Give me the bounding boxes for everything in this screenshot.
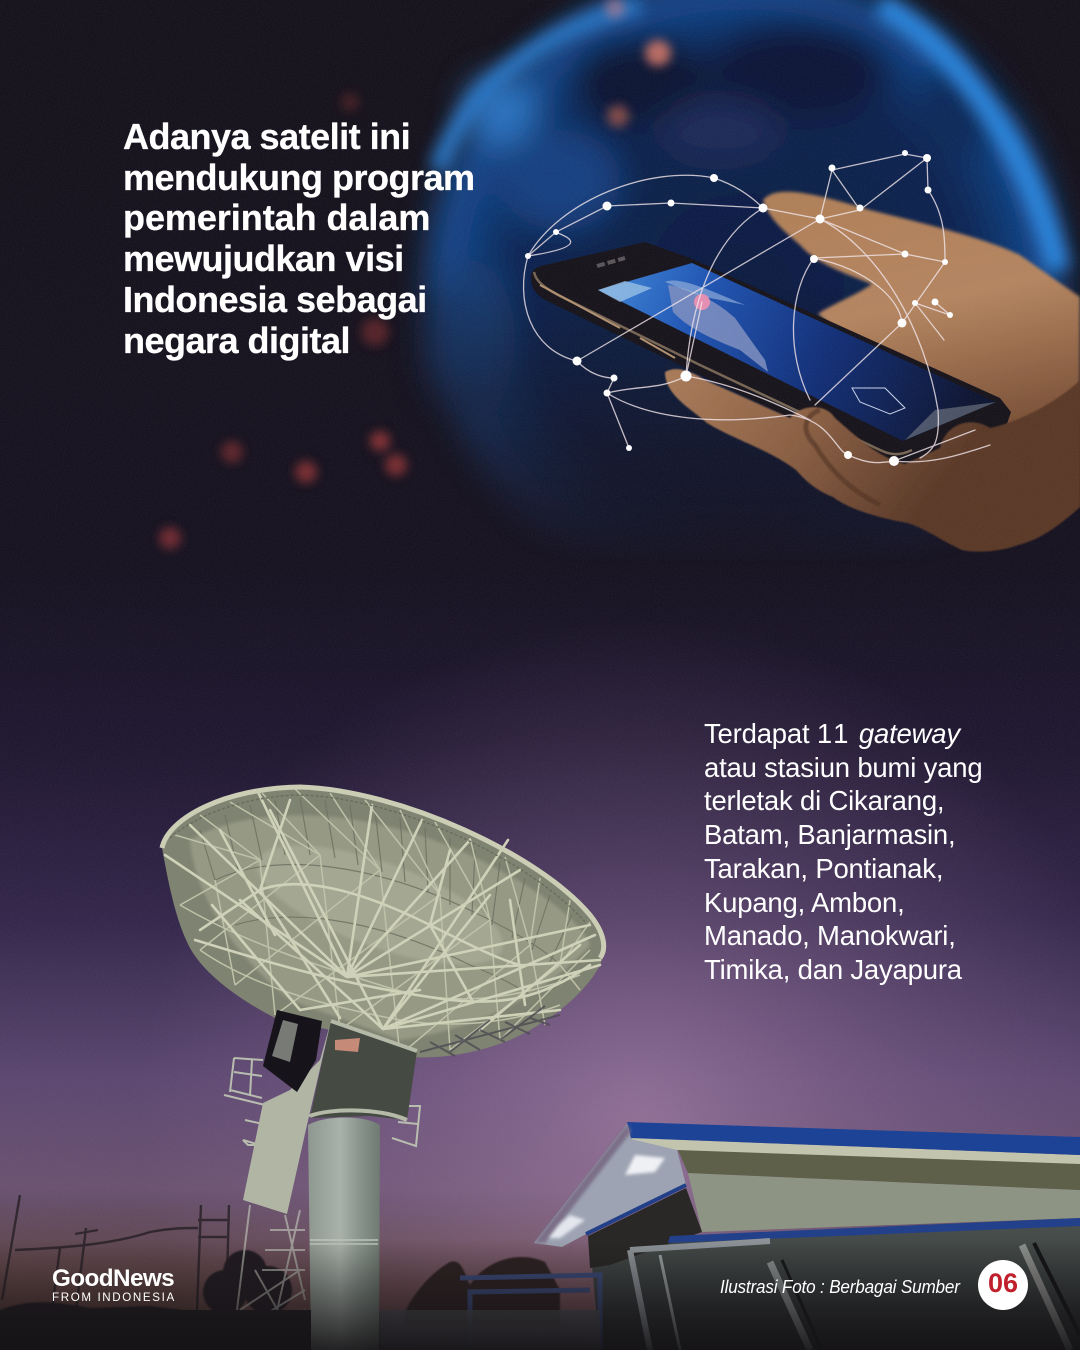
phone metallic edge: [534, 272, 912, 454]
dish thin truss lattice: [175, 789, 590, 1055]
blue roof band: [627, 1122, 1080, 1155]
blue fascia stripe: [668, 1218, 1080, 1243]
heading: mendukung program: [123, 157, 475, 198]
soffit highlights: [534, 1124, 665, 1243]
pedestal column: [308, 1118, 380, 1350]
gateway text block: terletak di Cikarang,: [704, 785, 944, 816]
lower wall: [590, 1222, 1080, 1350]
gate structure: [460, 1275, 600, 1350]
satellite dish antenna: [162, 787, 604, 1350]
roof soffit: [534, 1124, 686, 1247]
tree silhouettes: [0, 1250, 560, 1325]
dark lattice window: [588, 1188, 702, 1268]
gateway text block: Tarakan, Pontianak,: [704, 853, 943, 884]
yoke arm panel: [243, 1021, 331, 1214]
heading: Indonesia sebagai: [123, 279, 427, 320]
dish rim: [162, 787, 604, 958]
feed horn detail: [272, 1020, 298, 1062]
pedestal band: [310, 1240, 378, 1244]
speaker: [597, 258, 625, 266]
dish truss struts: [165, 792, 600, 1030]
logo: GoodNews from Indonesia: GoodNews: [52, 1265, 174, 1292]
equipment box: [310, 1021, 417, 1120]
reflector panel ribs: [200, 798, 572, 995]
blue under-roof edge: [586, 1185, 686, 1234]
dish bowl: [162, 787, 604, 1057]
logo: GoodNews from Indonesia: [52, 1265, 176, 1304]
lower lattice: [420, 1006, 560, 1056]
utility poles and wires: [2, 1195, 229, 1315]
gateway text block: Manado, Manokwari,: [704, 920, 956, 951]
equipment box interior glow: [335, 1038, 360, 1052]
ground station building: [460, 1122, 1080, 1350]
heading: pemerintah dalam: [123, 197, 430, 238]
red bokeh lights: [159, 0, 671, 549]
blurred blue globe: [425, 0, 1063, 608]
railing platforms: [224, 1058, 420, 1146]
black feed horn unit: [263, 1010, 322, 1092]
network nodes: [525, 150, 953, 466]
dark foreground vignette: [0, 1240, 1080, 1350]
photo credit: Ilustrasi Foto : Berbagai Sumber: [720, 1276, 960, 1297]
low perimeter wall: [380, 1310, 600, 1350]
gateway text block: Timika, dan Jayapura: [704, 954, 962, 985]
gateway text block: atau stasiun bumi yang: [704, 752, 982, 783]
dish reflector shading: [190, 815, 590, 1040]
heading: [123, 116, 475, 361]
network constellation overlay: [524, 154, 990, 463]
porch columns: [630, 1241, 1080, 1350]
box frame: [310, 1021, 417, 1120]
heading: mewujudkan visi: [123, 238, 404, 279]
logo: GoodNews from Indonesia: FROM INDONESIA: [52, 1291, 176, 1304]
gateway text block: Batam, Banjarmasin,: [704, 819, 955, 850]
heading: negara digital: [123, 320, 350, 361]
gateway text block: [704, 718, 982, 985]
page number badge: [978, 1260, 1028, 1310]
gateway text block: Kupang, Ambon,: [704, 887, 905, 918]
phone side buttons: [540, 285, 675, 358]
phone screen with world map: [598, 263, 996, 441]
page number badge: 06: [988, 1268, 1018, 1298]
upper wall: [688, 1173, 1080, 1232]
fingers in front of the phone: [665, 369, 1080, 552]
tower lattice: [232, 1205, 305, 1350]
phone body: [531, 242, 1011, 466]
gateway text block: Terdapat 11 gateway: [704, 718, 960, 749]
fascia beam: [677, 1148, 1080, 1190]
hand behind the phone: [763, 192, 1080, 507]
smartphone: [531, 242, 1011, 466]
cream roof trim: [631, 1138, 1080, 1164]
heading: Adanya satelit ini: [123, 116, 410, 157]
